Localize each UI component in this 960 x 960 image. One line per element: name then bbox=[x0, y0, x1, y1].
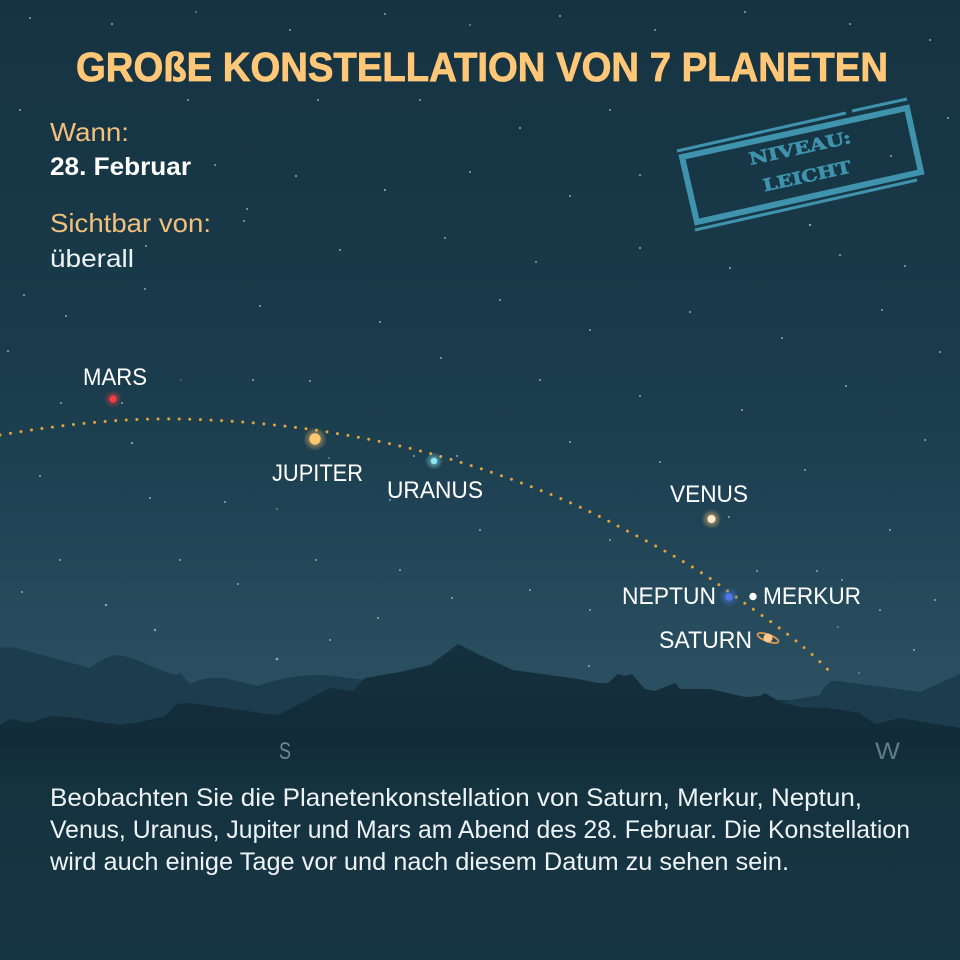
stamp: difficulty level bbox=[677, 99, 921, 230]
description text: Beobachten Sie die Planetenkonstellation von Saturn, Merkur, Neptun, bbox=[50, 784, 862, 812]
description text bbox=[49, 784, 910, 876]
planet: Neptune: NEPTUN bbox=[622, 583, 716, 610]
planet: Saturn: SATURN bbox=[659, 627, 752, 654]
night sky background bbox=[0, 0, 960, 700]
stars bbox=[7, 11, 949, 674]
mountains: front ridge bbox=[0, 644, 960, 960]
description text: wird auch einige Tage vor und nach diesem Datum zu sehen sein. bbox=[49, 848, 789, 876]
planet: Venus bbox=[670, 481, 748, 529]
planet: Mars bbox=[83, 364, 147, 408]
planet: Jupiter bbox=[272, 427, 363, 487]
title: GROßE KONSTELLATION VON 7 PLANETEN bbox=[76, 44, 888, 90]
info block: visible from: Sichtbar von: bbox=[50, 208, 211, 238]
mountains: back ridge bbox=[0, 647, 960, 760]
planet: Venus: VENUS bbox=[670, 481, 748, 508]
info block: visible from bbox=[50, 208, 211, 273]
stamp: difficulty level: NIVEAU: bbox=[747, 128, 853, 170]
description text: Venus, Uranus, Jupiter und Mars am Abend des 28. Februar. Die Konstellation bbox=[50, 816, 910, 844]
info block: when: 28. Februar bbox=[50, 153, 191, 181]
info block: when bbox=[50, 117, 191, 181]
planet: Uranus: URANUS bbox=[387, 477, 483, 504]
compass label: south: S bbox=[279, 738, 291, 765]
info block: visible from: überall bbox=[50, 245, 134, 273]
stamp: difficulty level: LEICHT bbox=[761, 157, 854, 196]
planet: Mars: MARS bbox=[83, 364, 147, 391]
ecliptic dotted arc bbox=[0, 419, 831, 673]
compass label: west: W bbox=[875, 738, 900, 765]
info block: when: Wann: bbox=[50, 117, 129, 147]
planet: Mercury: MERKUR bbox=[763, 583, 861, 610]
planet: Uranus bbox=[387, 452, 483, 504]
planet: Jupiter: JUPITER bbox=[272, 460, 363, 487]
